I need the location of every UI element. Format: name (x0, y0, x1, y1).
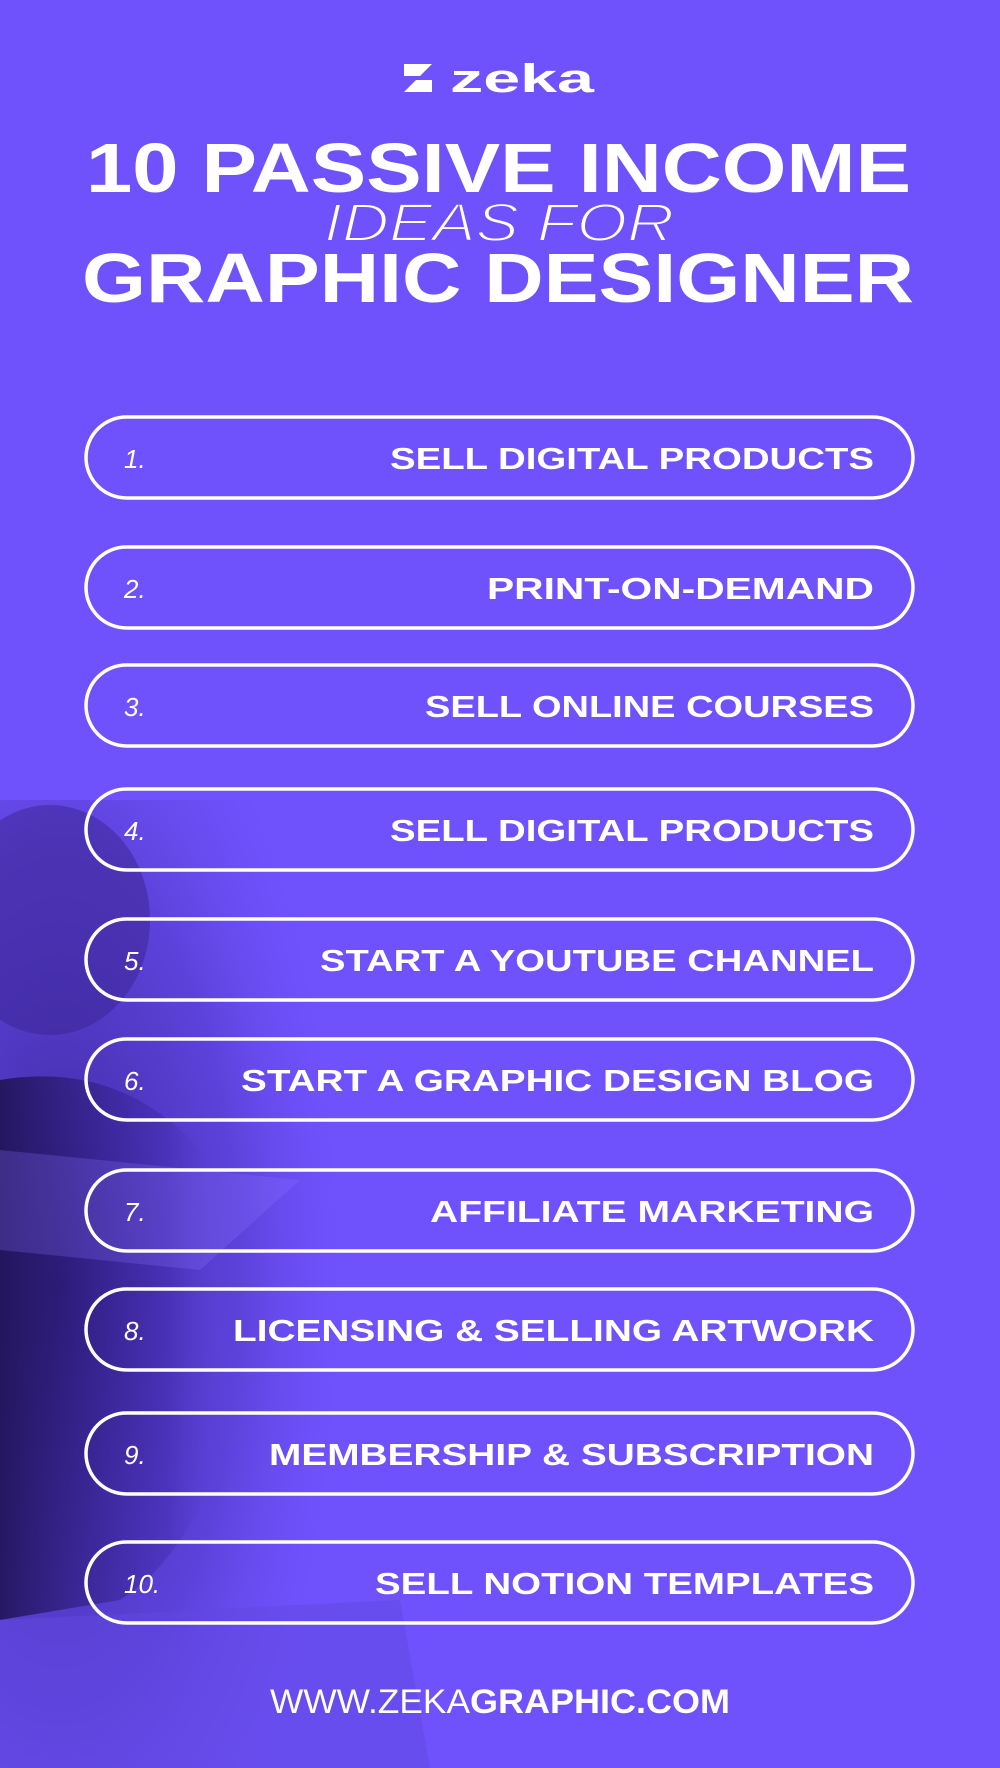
text: START A GRAPHIC DESIGN BLOG (241, 1063, 874, 1098)
title: IDEAS FOR (324, 193, 674, 253)
list of ideas (86, 417, 913, 1623)
text: 2. (123, 574, 146, 604)
text: START A YOUTUBE CHANNEL (320, 943, 874, 978)
footer url: WWW.ZEKA (270, 1683, 470, 1721)
text: 3. (124, 692, 146, 722)
title: 10 PASSIVE INCOME (86, 129, 911, 207)
text: 8. (124, 1316, 146, 1346)
text: 5. (124, 946, 146, 976)
logo: zeka: zeka (450, 57, 595, 101)
text: 1. (124, 444, 146, 474)
text: 6. (124, 1066, 146, 1096)
text: SELL DIGITAL PRODUCTS (390, 441, 874, 476)
text: LICENSING & SELLING ARTWORK (233, 1313, 875, 1348)
text: 4. (124, 816, 146, 846)
text: 10. (124, 1569, 160, 1599)
text: SELL ONLINE COURSES (425, 689, 874, 724)
text: SELL DIGITAL PRODUCTS (390, 813, 874, 848)
text: AFFILIATE MARKETING (430, 1194, 874, 1229)
photo: person with tablet (0, 800, 430, 1768)
footer url (270, 1683, 730, 1721)
text: SELL NOTION TEMPLATES (375, 1566, 874, 1601)
text: PRINT-ON-DEMAND (487, 571, 874, 606)
title: GRAPHIC DESIGNER (82, 239, 914, 317)
text: 7. (124, 1197, 146, 1227)
title (82, 129, 914, 317)
logo: zeka (404, 57, 595, 101)
footer url: GRAPHIC.COM (470, 1683, 730, 1721)
text: 9. (124, 1440, 146, 1470)
text: MEMBERSHIP & SUBSCRIPTION (269, 1437, 874, 1472)
